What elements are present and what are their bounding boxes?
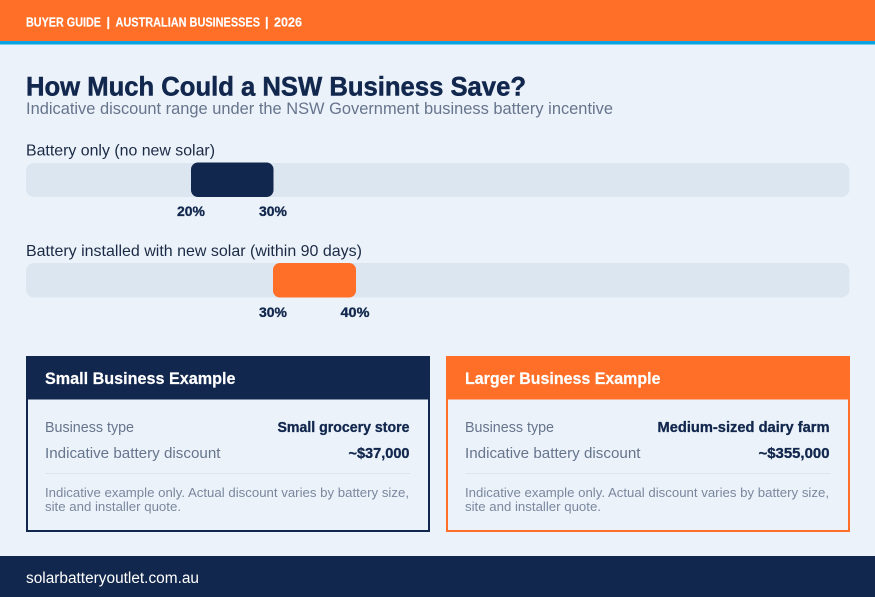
footer url: solarbatteryoutlet.com.au xyxy=(26,570,199,587)
row label: business type: Business type xyxy=(45,419,134,436)
header text: BUYER GUIDE xyxy=(26,16,101,30)
panel heading band xyxy=(446,356,850,400)
label 40%: 40% xyxy=(340,304,370,320)
row label: discount: Indicative battery discount xyxy=(45,445,221,462)
bar label: battery only: Battery only (no new solar) xyxy=(26,142,215,160)
row value: business type: Small grocery store xyxy=(278,420,410,436)
panel heading: Small Business Example xyxy=(45,369,236,388)
bar track xyxy=(26,263,850,298)
panel note: site and installer quote. xyxy=(45,499,181,514)
subtitle: Indicative discount range under the NSW Government business battery incentive xyxy=(26,100,613,118)
panel: small business example xyxy=(26,356,430,531)
bar range 20 to 30 percent xyxy=(191,162,274,197)
footer band xyxy=(0,556,875,597)
bar range 30 to 40 percent xyxy=(273,263,356,298)
header text: | xyxy=(265,16,268,30)
range bar: battery only xyxy=(26,142,850,219)
label 20%: 20% xyxy=(177,203,206,219)
label 30%: 30% xyxy=(259,304,288,320)
panel note: Indicative example only. Actual discount varies by battery size, xyxy=(45,485,409,500)
panel note: Indicative example only. Actual discount varies by battery size, xyxy=(465,485,829,500)
row value: discount: ~$355,000 xyxy=(758,446,830,462)
panel: larger business example xyxy=(446,356,850,531)
panel heading: Larger Business Example xyxy=(465,369,660,388)
header text: | xyxy=(106,16,110,30)
title: How Much Could a NSW Business Save? xyxy=(26,72,526,102)
label 30%: 30% xyxy=(259,203,288,219)
panel note: site and installer quote. xyxy=(465,499,601,514)
header text: AUSTRALIAN BUSINESSES xyxy=(116,16,260,30)
row label: discount: Indicative battery discount xyxy=(465,445,641,462)
range bar: battery with solar xyxy=(26,243,850,320)
bar track xyxy=(26,163,850,197)
row value: discount: ~$37,000 xyxy=(348,446,410,462)
bar label: battery with solar: Battery installed with new solar (within 90 days) xyxy=(26,243,362,260)
header band xyxy=(0,0,875,44)
row label: business type: Business type xyxy=(465,419,554,436)
row value: business type: Medium-sized dairy farm xyxy=(658,420,830,436)
panel heading band xyxy=(26,356,430,400)
header text: 2026 xyxy=(274,16,302,30)
